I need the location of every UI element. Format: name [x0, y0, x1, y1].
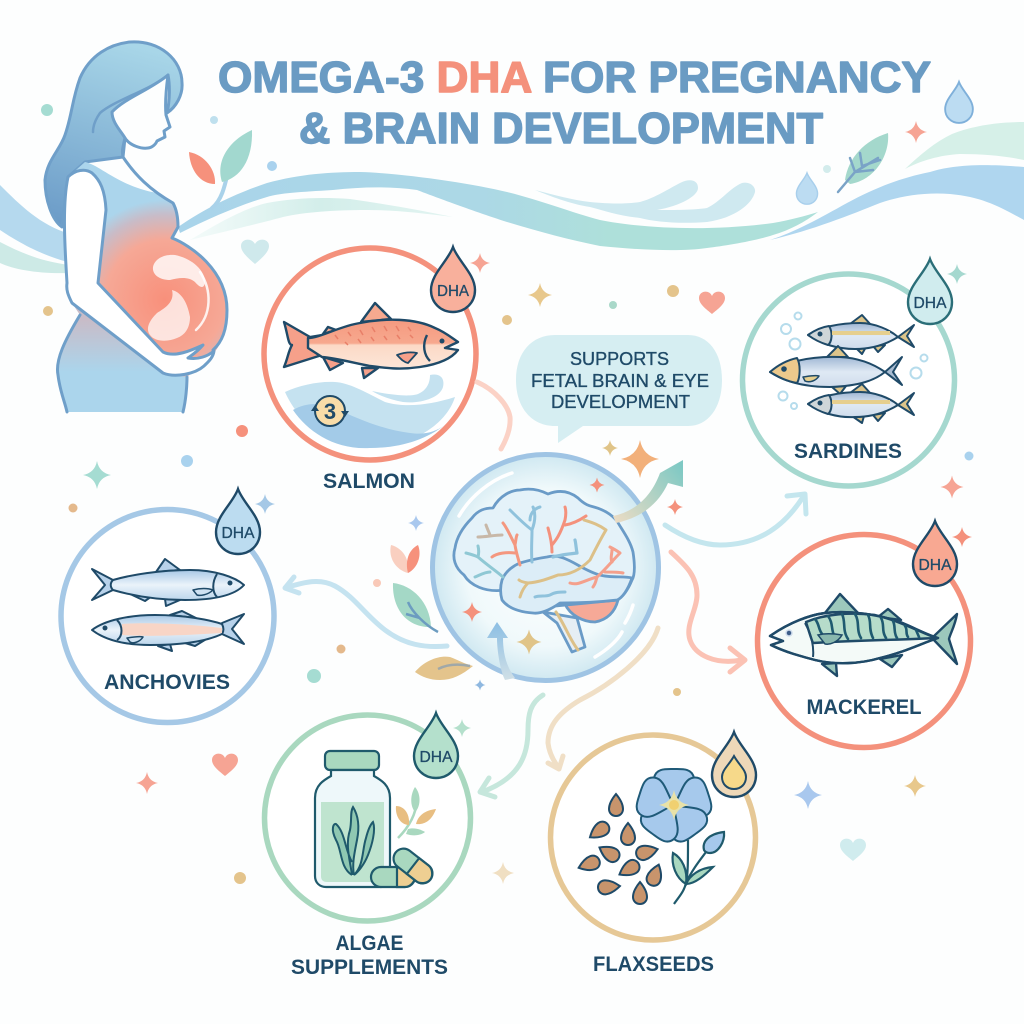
herb sprig [396, 787, 436, 838]
callout: supports fetal brain and eye development: FETAL BRAIN & EYE [531, 370, 709, 391]
salmon eye [440, 338, 444, 344]
background waves [0, 122, 1024, 273]
leaves near brain [390, 545, 473, 680]
sardine middle [770, 346, 902, 394]
title: OMEGA-3 DHA FOR PREGNANCY [218, 53, 931, 102]
label: sardines: SARDINES [794, 440, 902, 463]
pregnant woman illustration [45, 42, 227, 412]
label: salmon: SALMON [323, 470, 415, 493]
anchovy top [92, 559, 244, 606]
panel: algae supplements [264, 713, 471, 979]
title: & BRAIN DEVELOPMENT [299, 104, 823, 153]
callout: supports fetal brain and eye development: DEVELOPMENT [551, 391, 690, 412]
anchovy bottom [92, 611, 244, 651]
sparkles near brain [602, 440, 683, 515]
DHA drop: DHA [918, 557, 952, 574]
sparkles in circle [462, 478, 604, 654]
brain branches [466, 507, 623, 650]
top right decorations [796, 82, 973, 204]
leaf sprig beside woman [189, 130, 252, 208]
bubbles [778, 312, 928, 409]
scattered sparkles and hearts [83, 283, 964, 884]
small dots [41, 104, 974, 884]
seeds [576, 794, 665, 904]
DHA drop [913, 521, 957, 586]
oil drop [712, 732, 756, 797]
mackerel fish [770, 594, 957, 676]
DHA drop: DHA [222, 525, 255, 542]
label: flaxseeds: FLAXSEEDS [593, 953, 714, 976]
label: algae supplements: SUPPLEMENTS [291, 956, 448, 979]
omega 3 badge: 3 [324, 399, 336, 424]
supplement bottle [315, 751, 390, 887]
DHA drop [431, 247, 475, 312]
callout: supports fetal brain and eye development: SUPPORTS [570, 348, 669, 369]
salmon scales [335, 326, 413, 345]
water waves [285, 375, 455, 448]
stem and leaves [673, 832, 724, 904]
sardine bottom [808, 384, 914, 423]
DHA drop: DHA [420, 749, 453, 766]
sardine top [808, 315, 914, 354]
flax flower [633, 769, 715, 846]
brain [454, 489, 634, 652]
label: algae supplements [291, 932, 448, 979]
panel: mackerel [758, 521, 972, 748]
DHA drop [414, 713, 458, 778]
panel: sardines [742, 259, 967, 486]
DHA drop [216, 489, 260, 554]
label: mackerel: MACKEREL [806, 696, 922, 719]
mackerel fin and eye [786, 630, 842, 644]
salmon fish [284, 303, 458, 378]
panel: central brain [432, 454, 658, 680]
DHA drop: DHA [914, 295, 947, 312]
panel: salmon [264, 247, 490, 493]
up arrow in circle [487, 622, 515, 680]
glass highlights [459, 473, 633, 657]
label: algae supplements: ALGAE [336, 932, 404, 955]
label: anchovies: ANCHOVIES [104, 671, 230, 694]
omega 3 badge [311, 396, 349, 426]
title [218, 53, 931, 153]
DHA drop [908, 259, 952, 324]
sardine eyes [781, 332, 822, 406]
DHA drop: DHA [437, 283, 469, 300]
heart near woman [241, 240, 269, 264]
callout: supports fetal brain and eye development [516, 335, 722, 443]
capsules [371, 845, 436, 887]
growth arrow [613, 460, 683, 523]
panel: flaxseeds [550, 732, 756, 976]
mackerel stripes [815, 614, 919, 639]
panel: anchovies [61, 489, 275, 722]
connecting arrows [285, 382, 806, 797]
